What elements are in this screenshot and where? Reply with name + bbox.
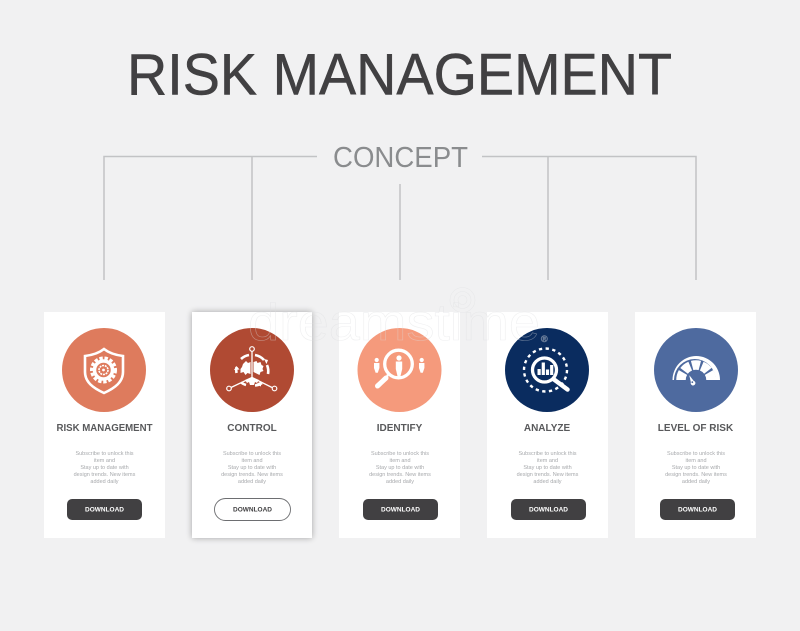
- description: design trends. New items: [517, 472, 579, 478]
- label: ANALYZE: [524, 423, 570, 434]
- title: RISK MANAGEMENT: [127, 42, 672, 108]
- description: [74, 451, 136, 485]
- download button outline: DOWNLOAD: [233, 506, 272, 514]
- description: Stay up to date with: [228, 465, 276, 471]
- download button: [67, 499, 142, 520]
- description: item and: [389, 458, 411, 464]
- icon: shield with gear: [62, 328, 146, 412]
- icon: control network: [210, 328, 294, 412]
- download button: DOWNLOAD: [678, 506, 717, 514]
- card: analyze: [487, 312, 608, 538]
- description: item and: [537, 458, 558, 464]
- description: added daily: [90, 479, 119, 485]
- description: added daily: [386, 479, 414, 485]
- description: item and: [241, 458, 263, 464]
- icon: magnifier with people: [358, 328, 442, 412]
- description: added daily: [238, 479, 266, 485]
- download button: DOWNLOAD: [381, 506, 420, 514]
- watermark: dreamstime: [248, 294, 540, 352]
- description: design trends. New items: [74, 472, 136, 478]
- download button: [511, 499, 586, 520]
- description: [517, 451, 579, 485]
- label: IDENTIFY: [377, 423, 423, 434]
- description: design trends. New items: [369, 472, 431, 478]
- description: Stay up to date with: [523, 465, 572, 471]
- watermark: ®: [541, 334, 548, 344]
- card: level of risk: [635, 312, 756, 538]
- description: Subscribe to unlock this: [223, 451, 281, 457]
- label: RISK MANAGEMENT: [56, 423, 152, 434]
- description: Stay up to date with: [80, 465, 129, 471]
- icon: gauge: [654, 328, 738, 412]
- label: CONTROL: [227, 423, 277, 434]
- download button outline: [214, 498, 290, 520]
- subtitle: concept: CONCEPT: [333, 142, 468, 174]
- download button: DOWNLOAD: [85, 506, 124, 514]
- description: added daily: [682, 479, 710, 485]
- description: design trends. New items: [665, 472, 727, 478]
- connector lines: [104, 156, 696, 280]
- description: item and: [685, 458, 707, 464]
- description: Subscribe to unlock this: [518, 451, 577, 457]
- description: Subscribe to unlock this: [371, 451, 429, 457]
- card: identify: [339, 312, 460, 538]
- download button: DOWNLOAD: [529, 506, 568, 514]
- description: Subscribe to unlock this: [75, 451, 134, 457]
- label: LEVEL OF RISK: [658, 423, 734, 434]
- description: Stay up to date with: [376, 465, 424, 471]
- description: item and: [94, 458, 115, 464]
- description: design trends. New items: [221, 472, 283, 478]
- description: [221, 451, 283, 485]
- description: added daily: [533, 479, 562, 485]
- card: control: [192, 312, 312, 538]
- download button: [363, 499, 438, 520]
- card: risk management: [44, 312, 165, 538]
- description: [369, 451, 431, 485]
- icon: magnifier with chart: [505, 328, 589, 412]
- description: Subscribe to unlock this: [667, 451, 725, 457]
- description: Stay up to date with: [672, 465, 720, 471]
- description: [665, 451, 727, 485]
- download button: [660, 499, 735, 520]
